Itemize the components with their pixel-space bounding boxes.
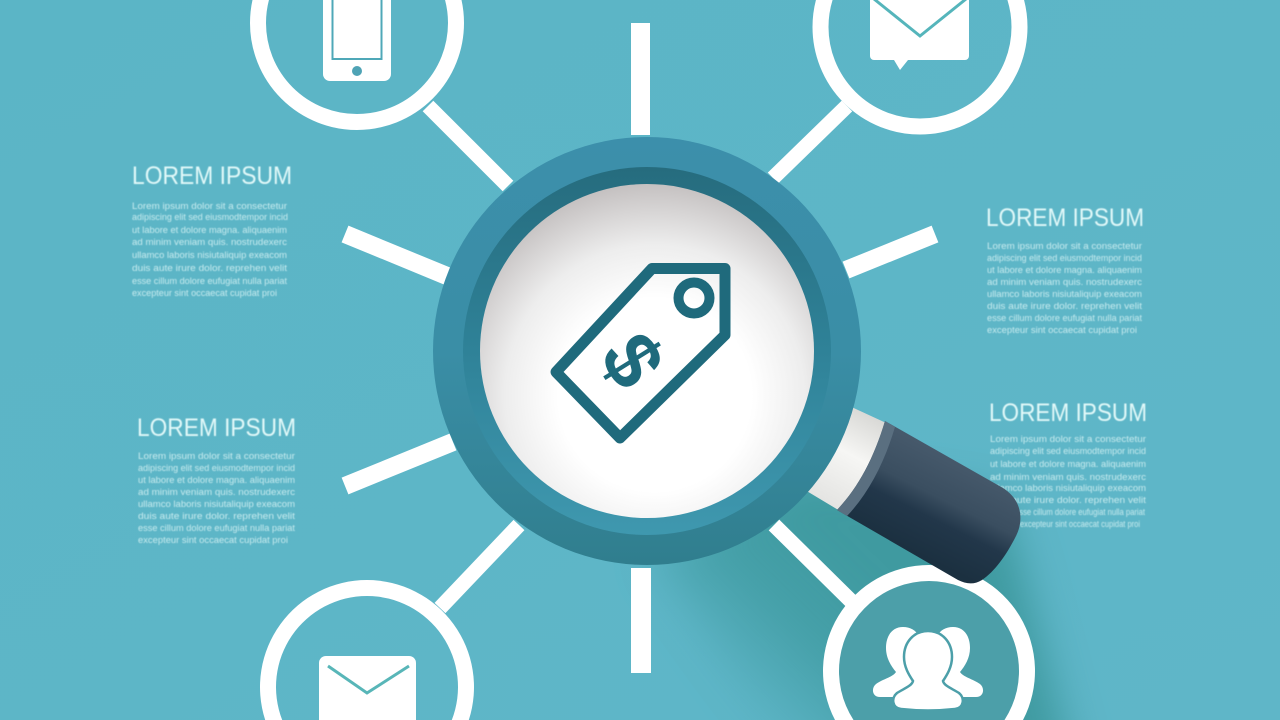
text block: lower left — [137, 414, 296, 545]
text block: upper left: esse cillum dolore eufugiat nulla pariat — [132, 276, 287, 286]
magnifier — [433, 137, 1020, 583]
text block: upper right: ad minim veniam quis. nostrudexerc — [987, 277, 1143, 287]
text block: lower left: LOREM IPSUM — [137, 414, 296, 442]
text block: lower right: LOREM IPSUM — [989, 399, 1147, 427]
text block: lower right: adipiscing elit sed eiusmodtempor incid — [990, 446, 1146, 456]
node: phone — [258, 0, 456, 122]
icon: phone — [323, 0, 391, 81]
text block: upper right: Lorem ipsum dolor sit a consectetur — [987, 241, 1142, 251]
text block: upper right: adipiscing elit sed eiusmodtempor incid — [987, 253, 1142, 263]
text block: lower left: Lorem ipsum dolor sit a consectetur — [138, 451, 295, 461]
node: mail bubble — [820, 0, 1020, 126]
text block: lower right: excepteur sint occaecat cupidat proi — [1020, 519, 1140, 529]
text block: lower left: excepteur sint occaecat cupidat proi — [138, 535, 288, 545]
text block: lower left: duis aute irure dolor. reprehen velit — [138, 511, 296, 521]
icon: people — [873, 627, 983, 710]
text block: upper left: adipiscing elit sed eiusmodtempor incid — [132, 212, 288, 222]
text block: lower right: ullamco laboris nisiutaliquip exeacom — [990, 483, 1146, 493]
spokes — [345, 23, 935, 673]
text block: upper right — [986, 204, 1144, 335]
text block: lower left: adipiscing elit sed eiusmodtempor incid — [138, 463, 295, 473]
text block: upper left: LOREM IPSUM — [132, 162, 292, 190]
text block: upper left: excepteur sint occaecat cupidat proi — [132, 288, 277, 298]
icon: price tag — [556, 268, 725, 438]
node: people — [823, 565, 1035, 720]
text block: upper left — [132, 162, 292, 298]
icon: price tag: $ — [583, 318, 682, 403]
text block: upper right: esse cillum dolore eufugiat nulla pariat — [987, 313, 1142, 323]
text block: upper left: ullamco laboris nisiutaliquip exeacom — [132, 250, 287, 260]
text block: upper left: ad minim veniam quis. nostrudexerc — [132, 237, 288, 247]
magnifier lens — [480, 184, 814, 518]
text block: lower left: ullamco laboris nisiutaliquip exeacom — [138, 499, 295, 509]
text block: lower left: ad minim veniam quis. nostrudexerc — [138, 487, 296, 497]
text block: lower right: Lorem ipsum dolor sit a consectetur — [990, 434, 1146, 444]
magnifier ring — [433, 137, 861, 565]
text block: lower left: esse cillum dolore eufugiat nulla pariat — [138, 523, 296, 533]
icon: mail bubble — [870, 0, 969, 70]
text block: lower right: ad minim veniam quis. nostrudexerc — [990, 472, 1147, 482]
text block: upper right: excepteur sint occaecat cupidat proi — [987, 325, 1137, 335]
text block: upper left: duis aute irure dolor. reprehen velit — [132, 263, 288, 273]
icon: envelope — [319, 656, 416, 720]
text block: upper right: LOREM IPSUM — [986, 204, 1144, 232]
node: envelope — [260, 580, 474, 720]
text block: lower right: esse cillum dolore eufugiat nulla pariat — [1015, 507, 1145, 517]
text block: lower right — [989, 399, 1147, 529]
text block: upper left: Lorem ipsum dolor sit a consectetur — [132, 201, 287, 211]
text block: upper left: ut labore et dolore magna. aliquaenim — [132, 225, 287, 235]
long shadow of magnifier — [660, 492, 1079, 720]
text block: upper right: ullamco laboris nisiutaliquip exeacom — [987, 289, 1142, 299]
magnifier handle — [800, 404, 1020, 583]
text block: lower left: ut labore et dolore magna. aliquaenim — [138, 475, 295, 485]
text block: lower right: duis aute irure dolor. reprehen velit — [990, 495, 1147, 505]
text block: upper right: duis aute irure dolor. reprehen velit — [987, 301, 1143, 311]
text block: upper right: ut labore et dolore magna. aliquaenim — [987, 265, 1142, 275]
text block: lower right: ut labore et dolore magna. aliquaenim — [990, 459, 1146, 469]
